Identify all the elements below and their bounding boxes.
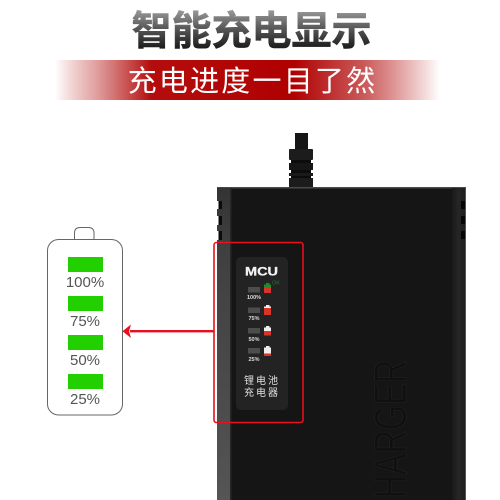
level 100% [66,257,104,291]
subtitle text: 充电进度一目了然 [128,65,377,98]
indicator 50%: 50% [248,337,260,343]
charger device [217,133,466,500]
level 100%: 100% [66,274,104,291]
OK indicator: OK [272,280,280,286]
battery outline [48,240,122,415]
right side face [452,188,466,500]
level 50%: 50% [70,352,100,369]
indicator 100% [247,283,271,301]
level 75%: 75% [70,313,100,330]
indicator 100%: 100% [247,295,261,301]
charger body [217,187,466,500]
level 50% [68,335,103,369]
right vents [461,201,465,239]
battery diagram [48,228,122,415]
indicator 75% [248,305,271,322]
battery cap [74,228,94,239]
subtitle banner [55,60,440,100]
indicator 25%: 25% [248,357,260,363]
cable strain relief [289,133,313,188]
control panel [236,257,288,410]
MCU logo: MCU [245,264,278,278]
level 75% [68,296,103,330]
embossed CHARGER lettering: HARGER [367,360,416,499]
arrow [122,324,214,338]
title: 智能充电显示 [132,10,372,54]
control panel: 充电器 [244,386,280,399]
indicator 75%: 75% [248,316,260,322]
panel label: 锂电池 [244,374,280,387]
left vents [217,201,218,240]
indicator 25% [248,346,271,363]
red highlight frame [214,242,303,422]
level 25%: 25% [70,391,100,408]
left side face [217,188,231,500]
indicator 50% [248,326,271,343]
level 25% [68,374,103,408]
